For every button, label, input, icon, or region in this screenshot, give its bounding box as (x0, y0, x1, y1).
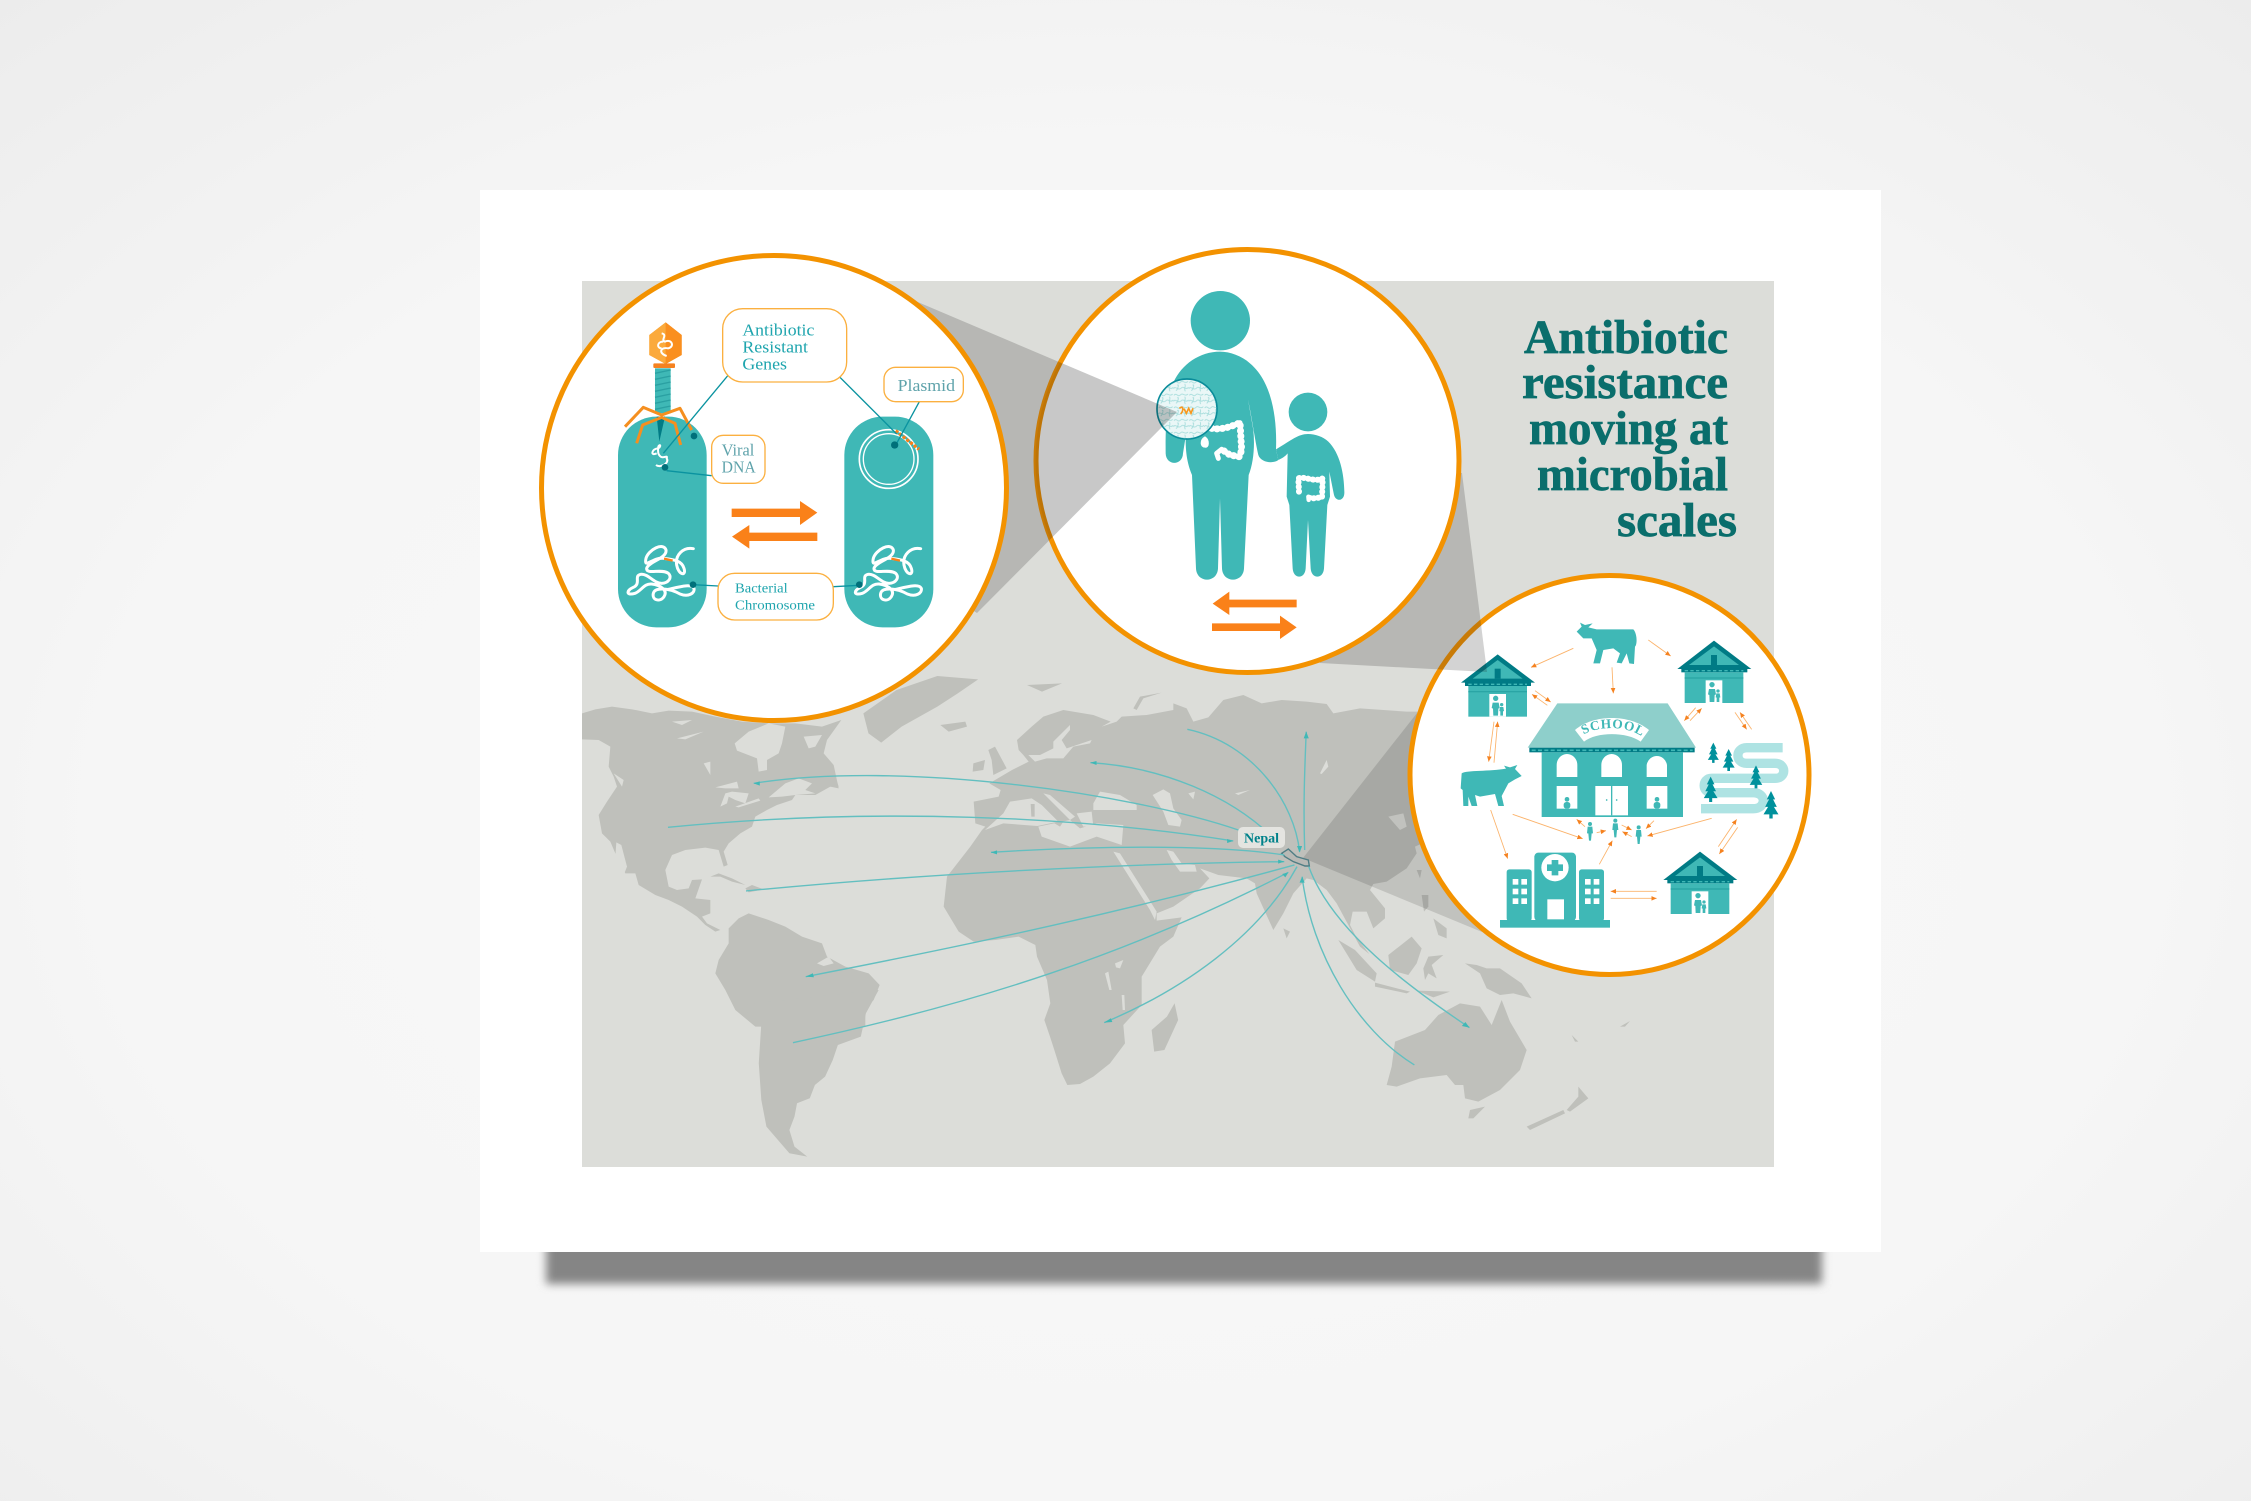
arrow: right (732, 501, 817, 525)
migration arcs from Nepal (668, 729, 1469, 1065)
callout: bacterial chromosome (718, 573, 833, 620)
callout: viral DNA: DNA (722, 457, 756, 476)
icon: river (1701, 748, 1784, 809)
callout: viral DNA (712, 435, 765, 483)
leader lines (663, 375, 919, 587)
arrow: right (1212, 616, 1297, 639)
icon: child figure (1276, 393, 1344, 577)
icon: adult figure (1166, 291, 1278, 580)
panel: human scale circle (1036, 250, 1459, 672)
seas and lakes cut into land (614, 720, 1407, 1010)
title: moving at (1529, 402, 1728, 455)
Nepal label (1238, 827, 1285, 848)
icon: adult intestine (1201, 423, 1242, 458)
title (1522, 311, 1737, 547)
icon: house bottom right (1663, 852, 1737, 914)
icon: bacteriophage (625, 322, 692, 466)
icon: house top right (1677, 641, 1751, 703)
icon: school: SCHOOL (1581, 719, 1642, 736)
callout: antibiotic resistant genes: Genes (742, 354, 787, 373)
panel: community scale circle (1408, 573, 1812, 977)
icon: microbiome lens (1157, 379, 1217, 439)
icon: trees (1704, 743, 1778, 818)
poster card (480, 190, 1881, 1252)
chromosome right (855, 547, 921, 600)
title: scales (1617, 494, 1737, 547)
callout: viral DNA: Viral (722, 441, 755, 460)
icon: hospital (1500, 853, 1610, 928)
bacterium right (844, 417, 933, 627)
arrow: left (1213, 592, 1297, 615)
bacterium left (618, 417, 707, 627)
drop shadow under poster (546, 1235, 1822, 1284)
landmasses: Americas north part (582, 683, 1062, 1027)
landmasses: Eurasia and Africa (944, 693, 1460, 1085)
network arrows (1489, 640, 1752, 898)
icon: people (1587, 819, 1642, 844)
arrow: left (732, 525, 817, 549)
icon: cow left (1461, 765, 1522, 806)
landmasses: Southeast Asia and Oceania (1375, 870, 1630, 1130)
wedge: map to community circle (1303, 713, 1482, 932)
title: microbial (1537, 448, 1728, 501)
callout: plasmid (884, 367, 963, 402)
icon: cow top (1577, 623, 1637, 664)
plasmid (859, 430, 919, 488)
wedge: gut lens to bacteria circle (774, 300, 1177, 613)
callout: bacterial chromosome: Bacterial (735, 582, 788, 597)
callout: plasmid: Plasmid (898, 376, 956, 395)
icon: house left (1461, 654, 1535, 717)
callout: antibiotic resistant genes: Antibiotic (742, 320, 814, 339)
title: resistance (1522, 356, 1728, 409)
chromosome left (628, 547, 694, 600)
anchor dots (662, 433, 898, 588)
world map panel (582, 281, 1774, 1167)
landmasses: islands of the Mediterranean (1031, 804, 1063, 827)
callout: antibiotic resistant genes: Resistant (742, 337, 808, 356)
landmasses: South America south, Greenland, Madagascar (738, 676, 1178, 1157)
panel: bacteria scale circle (542, 256, 1006, 720)
icon: child intestine (1298, 478, 1323, 500)
wedge: circle 2 to community circle (1247, 461, 1487, 672)
Nepal label: Nepal (1244, 832, 1279, 846)
title: Antibiotic (1524, 311, 1728, 364)
wedge tint inside human circle (1036, 362, 1176, 538)
callout: bacterial chromosome: Chromosome (735, 598, 815, 613)
callout: antibiotic resistant genes (723, 309, 847, 382)
Nepal outline (1282, 849, 1309, 866)
icon: school (1528, 703, 1696, 817)
